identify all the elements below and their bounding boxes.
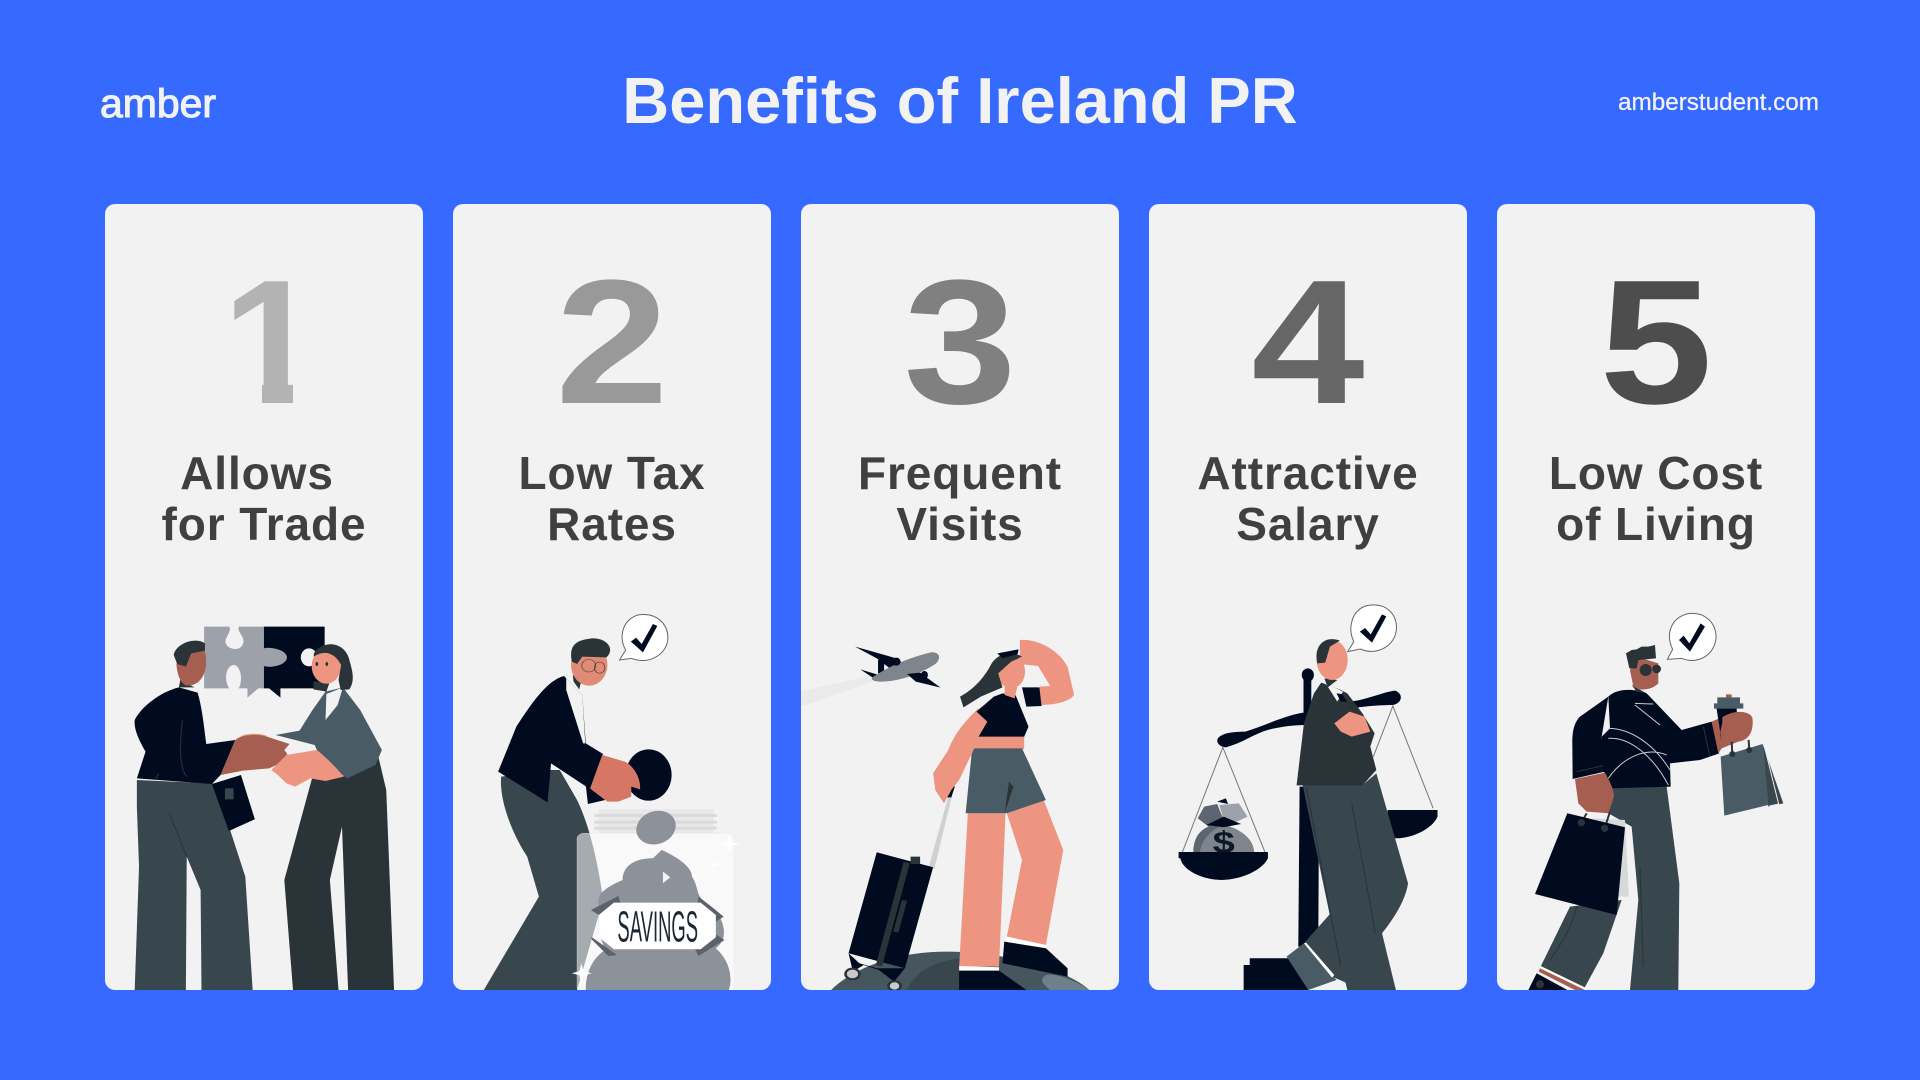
heading: of Living [1556,498,1756,550]
number 4: 4 [1251,243,1365,441]
number 5: 5 [1599,243,1713,441]
title: Benefits of Ireland PR [622,64,1298,137]
panel: card 4 attractive salary [1149,204,1467,990]
heading: Attractive [1197,447,1419,499]
illustration: man beside balance scale with money bag: $ [1213,825,1235,860]
illustration: man beside balance scale with money bag [1179,605,1438,990]
heading: Visits [896,498,1024,550]
panel: card 5 low cost of living [1497,204,1815,993]
number 3: 3 [903,243,1017,441]
card background [1149,204,1467,990]
website: amberstudent.com [1618,89,1819,116]
card background [801,204,1119,990]
panel: card 2 low tax rates [453,204,771,993]
illustration: man saving coins in jar [484,614,739,993]
heading: Frequent [858,447,1062,499]
heading: Allows [180,447,334,499]
number 2: 2 [555,243,669,441]
panel: card 1 allows for trade [105,204,423,990]
heading: Low Tax [519,447,705,499]
illustration: traveller with suitcase and plane [831,640,1090,990]
heading: for Trade [162,498,366,550]
panel: card 2 low tax rates: SAVINGS [617,902,698,951]
logo: amber: amber [100,82,216,126]
illustration: handshake with puzzle speech bubbles [135,627,394,990]
card background [1497,204,1815,990]
heading: Low Cost [1549,447,1763,499]
heading: Rates [547,498,677,550]
illustration: man with shopping bags and coffee [1528,613,1783,993]
card background [105,204,423,990]
number 1: 1 [222,243,321,441]
panel: card 3 frequent visits [801,204,1119,991]
heading: Salary [1236,498,1380,550]
card background [453,204,771,990]
